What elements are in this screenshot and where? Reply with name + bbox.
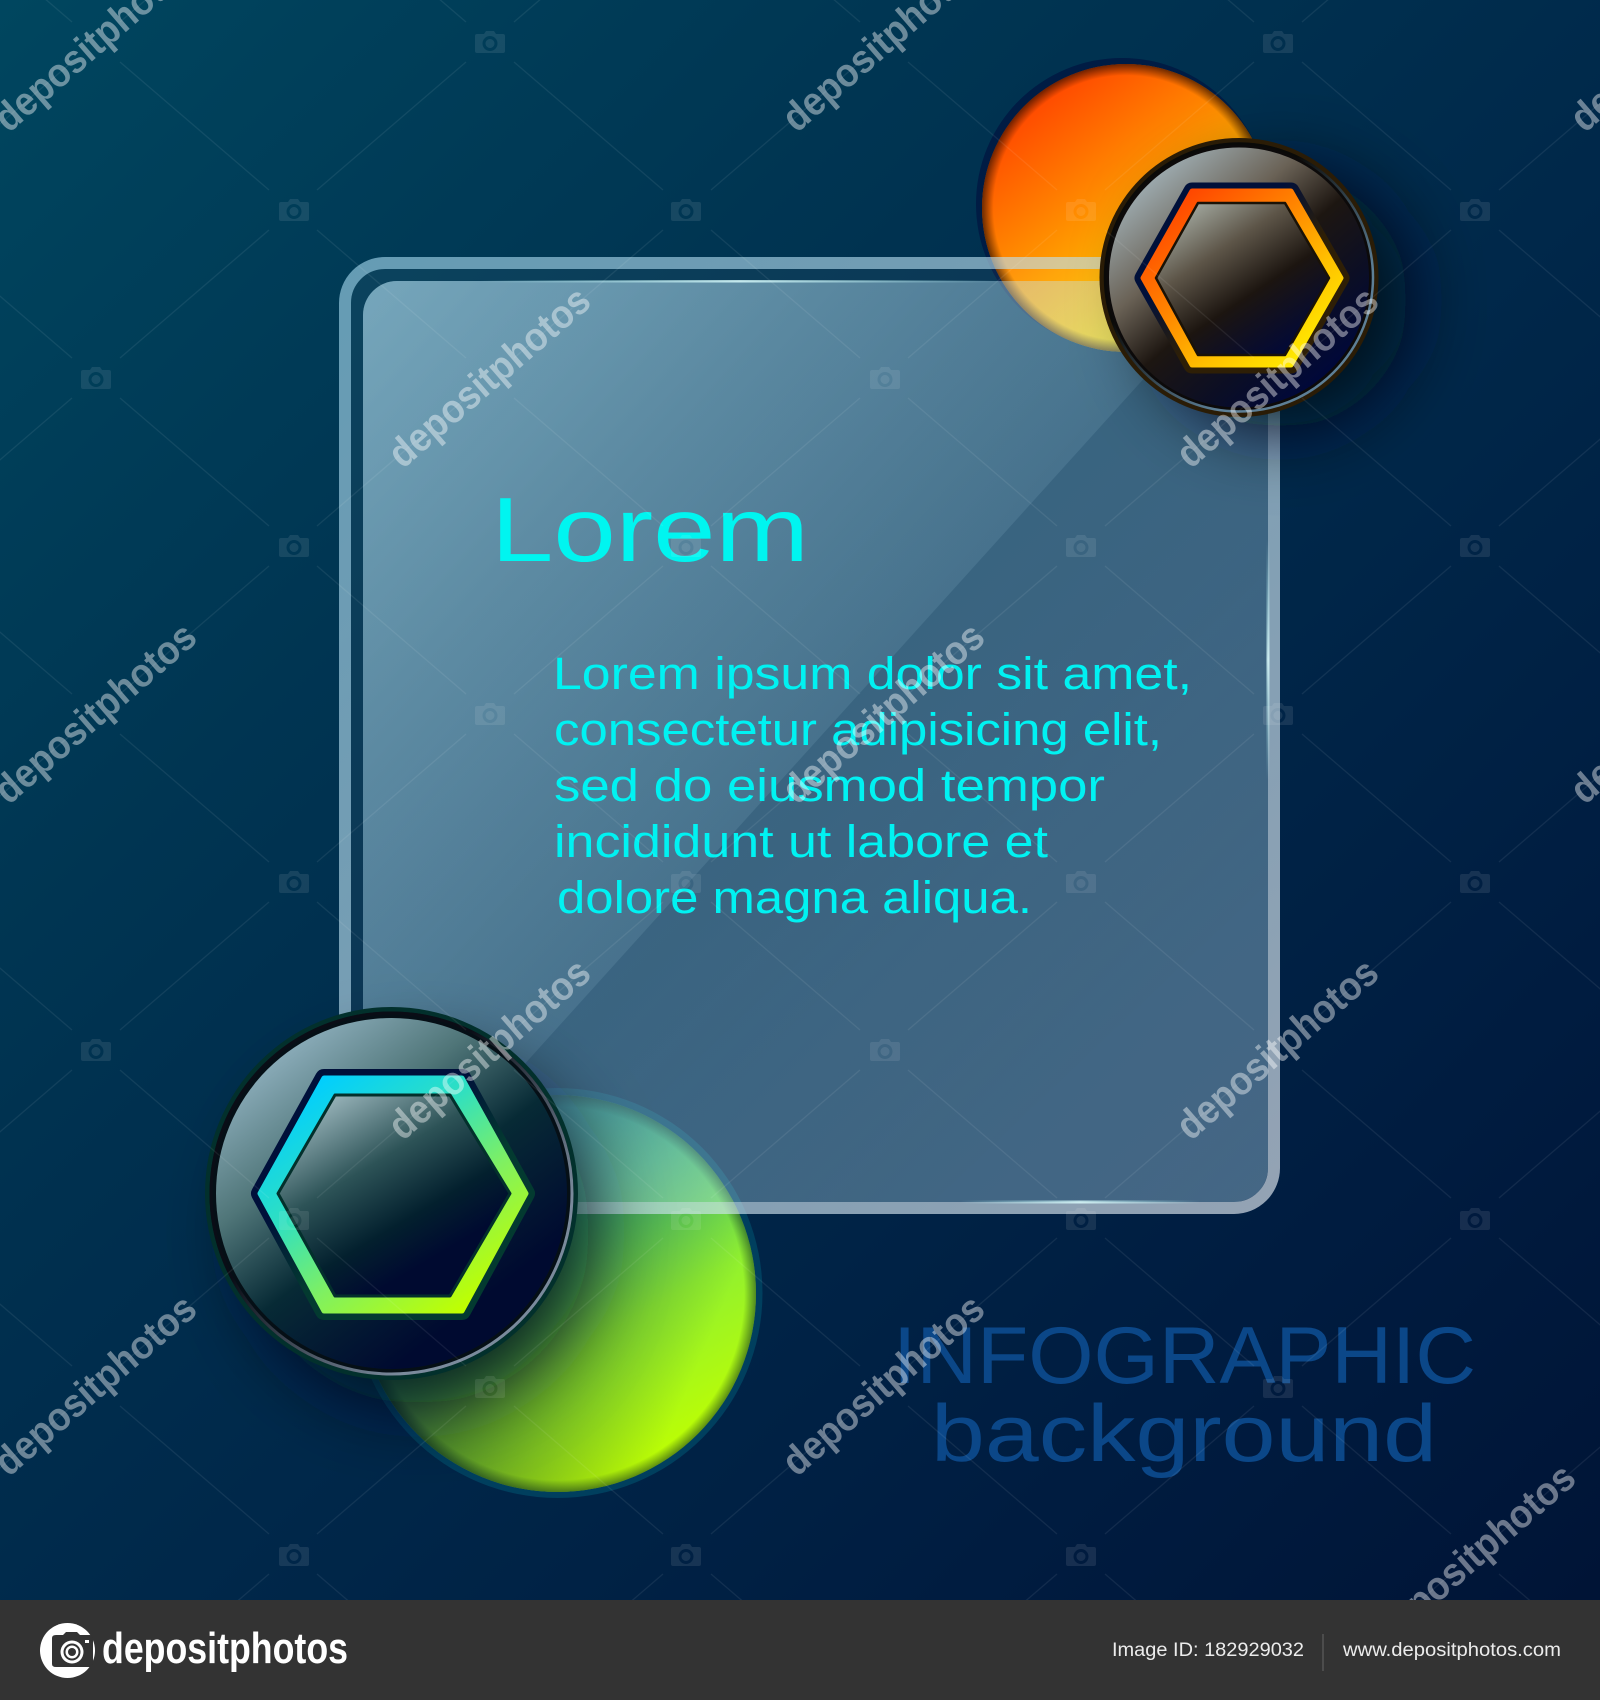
caption: INFOGRAPHIC background: INFOGRAPHIC bbox=[893, 1311, 1476, 1401]
footer bar bbox=[0, 1600, 1600, 1700]
glass panel bbox=[345, 263, 1274, 1208]
panel body text: incididunt ut labore et bbox=[554, 816, 1049, 867]
footer logo icon: camera bbox=[40, 1623, 95, 1678]
shadow: orange badge bbox=[1152, 172, 1408, 428]
shadow: green badge bbox=[246, 1060, 590, 1404]
caption: INFOGRAPHIC background bbox=[893, 1311, 1476, 1479]
footer url: www.depositphotos.com bbox=[1342, 1640, 1561, 1661]
panel heading: Lorem bbox=[491, 480, 809, 581]
watermark text: depositphotos bbox=[380, 278, 599, 476]
watermark text: depositphotos bbox=[1365, 1455, 1584, 1653]
watermark camera icons bbox=[81, 31, 1490, 1566]
watermark text: depositphotos bbox=[380, 950, 599, 1148]
panel body text: dolore magna aliqua. bbox=[557, 872, 1032, 923]
watermark text: depositphotos bbox=[774, 1286, 993, 1484]
watermark text: depositphotos bbox=[1168, 278, 1387, 476]
watermark text: depositphotos bbox=[1168, 950, 1387, 1148]
panel body text: Lorem ipsum dolor sit amet, bbox=[553, 648, 1192, 699]
caption: INFOGRAPHIC background: background bbox=[931, 1389, 1437, 1479]
badge: orange hexagon bbox=[1100, 138, 1378, 417]
green circle bbox=[352, 1088, 762, 1498]
orange circle bbox=[976, 58, 1270, 352]
footer logo wordmark: depositphotos bbox=[102, 1624, 348, 1673]
watermark text: depositphotos bbox=[774, 614, 993, 812]
panel body text: sed do eiusmod tempor bbox=[554, 760, 1105, 811]
panel body text bbox=[553, 648, 1192, 923]
panel body text: consectetur adipisicing elit, bbox=[554, 704, 1162, 755]
badge: green hexagon bbox=[205, 1007, 578, 1380]
footer image id: Image ID: 182929032 bbox=[1112, 1640, 1304, 1661]
